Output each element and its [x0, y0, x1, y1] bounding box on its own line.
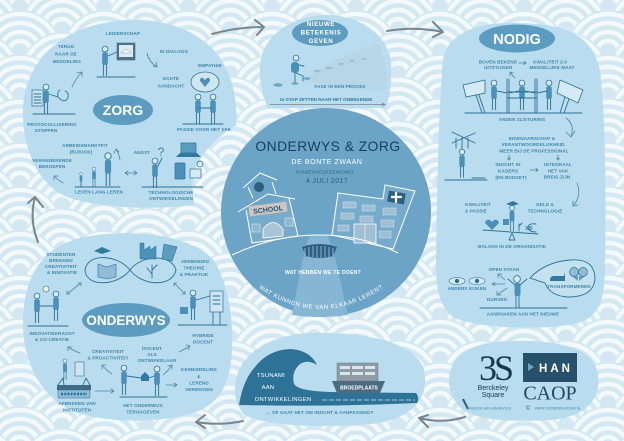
label: technologische ontwikkelingen: ONTWIKKELINGEN: [149, 196, 193, 201]
icon: sign left: [463, 80, 485, 113]
panel: nieuwe betekenis geven: [260, 15, 391, 108]
pill: zorg heading: [93, 95, 153, 125]
label: integraal: INTEGRAAL: [544, 162, 572, 167]
arrow: institutes to handover: [95, 389, 114, 393]
credit: copyright: ©: [526, 405, 531, 412]
credit: website: WWW.ONTWERPLEIDING.NL: [535, 406, 581, 410]
label: transformeren: TRANSFORMEREN: [547, 284, 591, 289]
logo: caop: CAOP: [523, 382, 577, 404]
arrow: double arrow right: [174, 283, 185, 294]
label: studenten brengen creativiteit: & INNOVATIE: [47, 270, 77, 275]
label: creativiteit proactiviteit: & PROACTIVITEIT: [87, 356, 129, 360]
icon: breaking down institutions: [57, 359, 91, 398]
icon: phone and devices: [175, 161, 203, 179]
icon: thought bubble with heart: [191, 72, 219, 92]
icon: two people with idea bulb: [28, 286, 68, 326]
label: integraal: HET VAK: [548, 168, 569, 174]
wave text: ONTWIKKELINGEN: [255, 397, 311, 403]
label: protocollisering stoppen: STOPPEN: [35, 128, 58, 133]
school sign: SCHOOL: [253, 205, 284, 216]
label: eigenaarschap: EIGENAARSCHAP &: [509, 136, 555, 141]
arrow: double arrow: [125, 171, 137, 175]
label: het onderwijs teruggeven: TERUGGEVEN: [126, 410, 160, 414]
icon: three growing figures: [75, 153, 120, 187]
label: kennisdeling lerend vermogen: KENNISDELING: [181, 367, 217, 372]
arrow: to hybride docent: [179, 345, 190, 352]
icon: tsunami wave: [239, 349, 418, 406]
label: hybride docent: DOCENT: [193, 340, 213, 344]
arrow: down left: [508, 155, 510, 160]
pill: nieuwe betekenis geven: GEVEN: [309, 38, 333, 45]
label: kwaliteit passie: & PASSIE: [465, 208, 487, 214]
icon: figure with clipboard and stethoscope: [32, 84, 75, 114]
label: eigenaarschap: MEER BIJ DE PROFESSIONAL: [499, 148, 569, 154]
icon: school building: [238, 173, 298, 243]
arrow: nieuwe betekenis to nodig: [387, 22, 443, 37]
arrow: down to balans: [573, 183, 579, 206]
arrow: to beroepen: [54, 176, 63, 183]
wave text: AAN: [262, 385, 274, 391]
label: kennisdeling lerend vermogen: LEREND: [189, 380, 209, 386]
icon: leader at presentation board: [97, 43, 135, 77]
arrow: double arrow left: [67, 283, 81, 294]
label: angst with question mark: ANGST: [134, 150, 150, 155]
arrow: timeline: [270, 103, 385, 106]
question: wat kunnen we van elkaar leren: WAT KUNNEN WE VAN ELKAAR LEREN?: [260, 284, 382, 309]
icon: hospital building: [332, 185, 415, 249]
icon: anxious person: [142, 158, 203, 188]
pill: nieuwe betekenis geven: [292, 20, 348, 46]
logo: han: [523, 353, 577, 382]
arrow: to creativiteit: [102, 365, 112, 374]
icon: balance with figure, heart and euro: [483, 201, 538, 240]
logo: han: HAN: [539, 363, 573, 375]
arrow: inzicht to integraal: [530, 168, 538, 172]
label: innovatiekracht co-creatie: INNOVATIEKRACHT: [29, 331, 75, 336]
icon: thought bubble with transformation: [530, 260, 595, 297]
label: studenten brengen creativiteit: BRENGEN: [49, 258, 73, 263]
label: kennisdeling lerend vermogen: VERMOGEN: [185, 387, 213, 392]
arrow: zorg to nieuwe betekenis: [212, 20, 264, 35]
label: aanpakken aan het nieuwe: AANPAKKEN AAN HET NIEUWE: [487, 312, 559, 316]
event name: RONDETAFELBIJEENKOMST: [296, 170, 354, 174]
panel: tsunami: [235, 333, 425, 426]
label: terug naar de bedoeling: TERUG: [58, 44, 74, 49]
panel: onderwys: [23, 233, 232, 421]
arrows: from figure outward: [492, 274, 507, 295]
arrow: to kennisdeling: [166, 383, 177, 387]
label: echte aandacht: AANDACHT: [158, 84, 185, 88]
step clouds backdrop: [305, 44, 387, 90]
label: anders kijken: ANDERS KIJKEN: [448, 286, 487, 291]
label: geld technologie: TECHNOLOGIE: [528, 208, 562, 214]
pill: nodig heading: NODIG: [493, 32, 541, 48]
label: in dialoog: IN DIALOOG: [160, 49, 188, 54]
arrow: leiderschap to dialoog: [147, 53, 157, 67]
icon: hybrid teacher at board: [178, 290, 227, 325]
label: protocollisering stoppen: PROTOCOLLISERING: [27, 122, 77, 127]
icon: two eyes: [449, 278, 485, 284]
label: creativiteit proactiviteit: CREATIVITEIT: [92, 349, 124, 354]
credit: author: GEESJE VAN LANGEVELD: [469, 406, 512, 410]
icon: two people handing over school: [120, 365, 167, 397]
icon: pen: [463, 399, 468, 409]
date: 4 JULI 2017: [306, 178, 348, 185]
label: geld technologie: GELD &: [536, 202, 554, 207]
label: afbreken van instituten: INSTITUTEN: [63, 408, 92, 412]
label: fase in een proces: FASE IN EEN PROCES: [314, 84, 366, 89]
label: durven: DURVEN: [487, 297, 508, 302]
pill: nodig heading: [479, 24, 555, 52]
arrow: logos to tsunami: [419, 415, 465, 427]
label: boven bekend uitstijgen: BOVEN BEKEND: [479, 60, 517, 64]
label: docent als ontwikkelaar: DOCENT: [142, 346, 162, 351]
label: inzicht in kaders: (EN BUDGET): [495, 175, 527, 180]
icon: ship: BROEDPLAATS: [340, 386, 379, 392]
label: technologische ontwikkelingen: TECHNOLOGISCHE: [149, 190, 193, 195]
label: leiderschap: LEIDERSCHAP: [106, 31, 140, 36]
panel: centre circle: [221, 108, 431, 317]
label: leven lang leren: LEVEN LANG LEREN: [75, 190, 124, 194]
panel: logos: [449, 341, 598, 421]
pill: zorg heading: ZORG: [103, 102, 143, 118]
label: angst with question mark: [134, 145, 165, 159]
pill: onderwys heading: [82, 303, 170, 337]
arrow: up to arbeidsmarktfit: [114, 149, 120, 160]
label: balans in de organisatie: BALANS IN DE ORGANISATIE: [478, 244, 546, 249]
arrow: to docent als ontwikkelaar: [163, 365, 172, 375]
label: hybride docent: HYBRIDE: [192, 333, 214, 338]
panel: nodig: [436, 23, 605, 328]
logo: berckeley square: Berckeley: [478, 385, 509, 392]
label: kwaliteit menselijke maat: MENSELIJKE MAAT: [529, 65, 575, 70]
label: innovatiekracht co-creatie: & CO-CREATIE: [35, 337, 69, 342]
label: kwaliteit passie: KWALITEIT: [465, 202, 491, 207]
label: boven bekend uitstijgen: UITSTIJGEN: [484, 65, 513, 70]
subtitle: DE BONTE ZWAAN: [291, 159, 363, 166]
icon: stepping stones: [314, 58, 367, 72]
label: afbreken van instituten: AFBREKEN VAN: [58, 401, 96, 406]
beam of light: [292, 235, 348, 317]
arrow: up to boven bekend: [510, 72, 515, 78]
label: docent als ontwikkelaar: ONTWIKKELAAR: [138, 358, 177, 363]
icon: lighthouse balcony: [302, 244, 337, 258]
icon: sign right: [557, 80, 583, 113]
label: arbeidsmarktfit: (BIJ/OOK): [70, 150, 93, 154]
label: open staan: OPEN STAAN: [489, 267, 520, 272]
label: terug naar de bedoeling: NAAR DE: [55, 52, 77, 56]
panel: zorg: [23, 20, 236, 208]
logo: berckeley square: 3S: [479, 348, 512, 388]
arrow: down curve: [566, 118, 575, 137]
label: studenten brengen creativiteit: STUDENTEN: [47, 252, 75, 257]
label: kennisdeling lerend vermogen: &: [197, 374, 201, 379]
label: veranderende beroepen: VERANDERENDE: [32, 158, 72, 163]
icon: infinity with book and tree: [85, 247, 176, 283]
label: kwaliteit menselijke maat: KWALITEIT 2.0: [533, 60, 567, 64]
label: veranderende beroepen: BEROEPEN: [39, 164, 66, 169]
icon: figure stepping forward: [274, 55, 310, 87]
icon: three figures and barrier: [465, 79, 582, 113]
label: empathie: EMPATHIE: [198, 63, 222, 68]
question: wat hebben we te doen: WAT HEBBEN WE TE DOEN?: [285, 270, 361, 276]
icon: laptop: [176, 143, 201, 157]
arrow: up to bedoeling: [72, 72, 82, 87]
logo: berckeley square: Square: [482, 392, 504, 399]
label: verbinden theorie praktijk: VERBINDEN: [181, 259, 209, 264]
label: docent als ontwikkelaar: ALS: [147, 352, 157, 357]
label: verbinden theorie praktijk: THEORIE: [183, 266, 205, 270]
dashed continuation: [322, 399, 415, 401]
label: inzicht in kaders: KADERS: [498, 168, 518, 174]
label: echte aandacht: ECHTE: [163, 76, 179, 81]
label: eerste stap zetten: 1e STAP ZETTEN NAAR HET ONBEKENDE: [280, 97, 372, 102]
label: angst with question mark: ?: [158, 145, 165, 159]
icon: puppet with crossed strings: [445, 132, 487, 180]
label: eigenaarschap: VERANTWOORDELIJKHEID: [502, 142, 565, 147]
label: het onderwijs teruggeven: HET ONDERWIJS: [123, 403, 163, 408]
title: ONDERWYS & ZORG: [255, 139, 401, 154]
icon: figure with raised arms: [480, 276, 567, 308]
pill: nieuwe betekenis geven: NIEUWE: [307, 21, 335, 28]
pill: nieuwe betekenis geven: BETEKENIS: [301, 30, 341, 36]
label: arbeidsmarktfit: ARBEIDSMARKTFIT: [62, 143, 108, 148]
wave text: TSUNAMI: [257, 373, 285, 379]
icon: ship: [332, 363, 385, 393]
arrow: onderwys to zorg: [28, 197, 43, 242]
caption: ... OF GAAT HET OM INZICHT & AANPASSING?: [267, 410, 373, 415]
icon: two people: [183, 94, 223, 124]
label: terug naar de bedoeling: BEDOELING: [53, 59, 81, 64]
label: passie voor het vak: PASSIE VOOR HET VAK: [177, 127, 232, 132]
label: studenten brengen creativiteit: CREATIVITEIT: [45, 264, 77, 269]
label: verbinden theorie praktijk: & PRAKTIJK: [180, 272, 209, 277]
label: inzicht in kaders: INZICHT IN: [496, 162, 520, 167]
icon: factory and building: [140, 243, 177, 261]
pill: onderwys heading: ONDERWYS: [86, 313, 166, 328]
arrow: to innovatiekracht: [68, 347, 80, 353]
arrow: down right: [556, 155, 560, 160]
label: ander zijsturing: ANDER ZIJSTURING: [499, 117, 546, 122]
arrow: tsunami to onderwys: [196, 415, 243, 428]
label: integraal: BREIG ZIJN: [544, 174, 571, 180]
ground line: [232, 235, 398, 255]
arrow: to kwaliteit: [519, 62, 526, 64]
